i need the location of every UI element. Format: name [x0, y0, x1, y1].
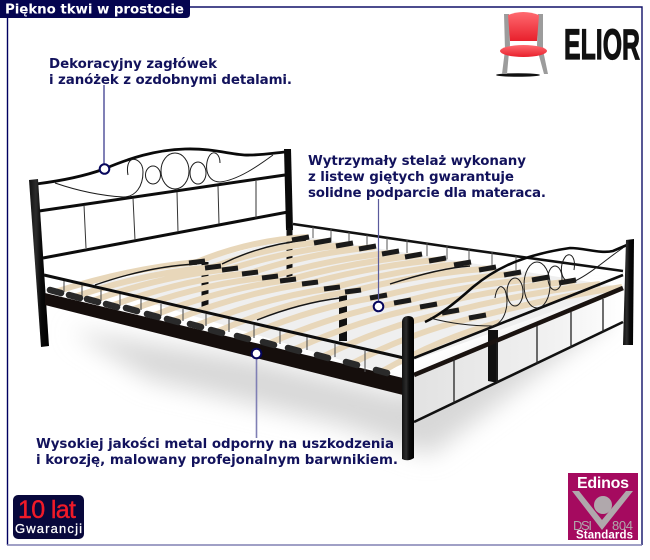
front side rail [44, 275, 404, 395]
slats near half [55, 262, 500, 372]
callout: headboard [49, 56, 292, 174]
callout: slats [308, 154, 546, 311]
callout: headboard: i zanóżek z ozdobnymi detalami. [49, 72, 292, 88]
callout: slats: solidne podparcie dla materaca. [308, 186, 546, 201]
slats far half [197, 237, 622, 317]
badge: Edinos standards: Edinos [577, 475, 629, 492]
badge: Edinos standards [568, 473, 638, 542]
badge: Edinos standards: Standards [576, 530, 633, 542]
callout: headboard: Dekoracyjny zagłówek [49, 56, 218, 72]
callout: slats: z listew giętych gwarantuje [308, 170, 514, 185]
dark slat edges [95, 240, 470, 320]
badge: 10 lat gwarancji [13, 495, 84, 539]
callout: metal: i korozję, malowany profejonalnym barwnikiem. [36, 453, 398, 468]
callout: metal: Wysokiej jakości metal odporny na uszkodzenia [36, 436, 394, 452]
badge: 10 lat gwarancji: Gwarancji [15, 521, 82, 536]
far side rail [293, 224, 623, 272]
bed illustration [29, 149, 634, 460]
title tab: Piękno tkwi w prostocie [5, 2, 184, 18]
support beams under slats [205, 228, 343, 341]
callout: metal [36, 349, 398, 468]
floor shadow [70, 300, 610, 455]
bed base shade [90, 236, 622, 372]
slat holders [189, 237, 576, 318]
icon: V and circle [572, 491, 633, 530]
logo: Elior [496, 12, 640, 77]
headboard [29, 149, 293, 347]
foot end [402, 239, 634, 460]
badge: 10 lat gwarancji: 10 lat [18, 496, 76, 524]
badge: Edinos standards: 804 [612, 518, 633, 533]
callout: slats: Wytrzymały stelaż wykonany [308, 154, 526, 169]
icon: red chair [496, 12, 548, 77]
badge: Edinos standards: DSI [573, 518, 592, 533]
